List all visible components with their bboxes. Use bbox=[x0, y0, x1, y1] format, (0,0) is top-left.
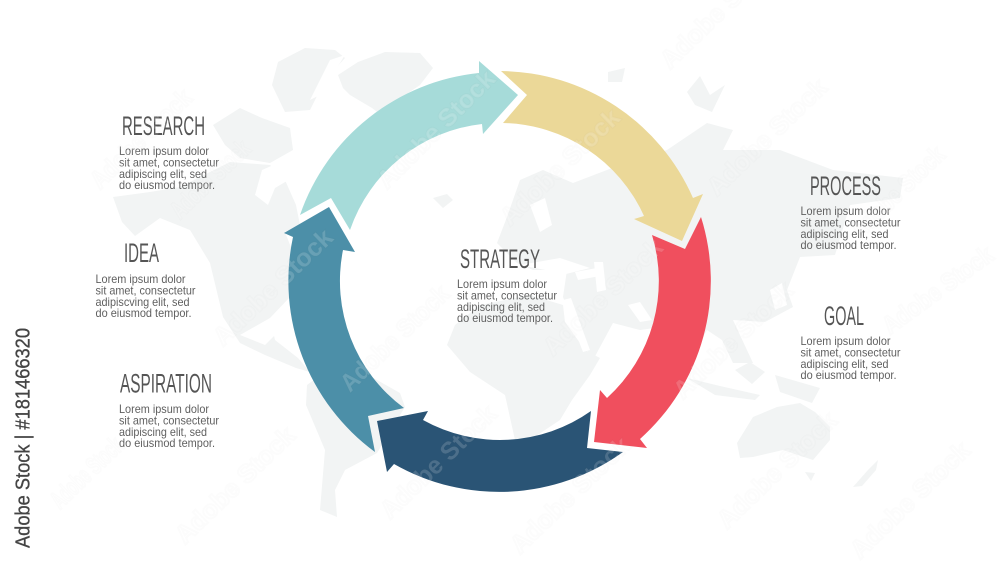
text block: process bbox=[800, 171, 900, 252]
text block: aspiration bbox=[119, 368, 219, 450]
text block: idea bbox=[96, 238, 196, 320]
stock watermarks: Adobe Stock bbox=[845, 436, 976, 563]
text block: aspiration: sit amet, consectetur bbox=[119, 414, 219, 428]
text block: process: do eiusmod tempor. bbox=[800, 238, 896, 252]
stock watermarks: Adobe Stock bbox=[85, 84, 198, 194]
text block: strategy: Lorem ipsum dolor bbox=[457, 277, 547, 291]
text block: idea: sit amet, consectetur bbox=[96, 284, 196, 298]
text block: aspiration: ASPIRATION bbox=[120, 368, 212, 398]
text block: process: adipiscing elit, sed bbox=[800, 227, 888, 241]
text block: idea: Lorem ipsum dolor bbox=[96, 272, 186, 286]
stock id side label: Adobe Stock | #181466320 bbox=[12, 328, 34, 548]
text block: process: PROCESS bbox=[810, 171, 881, 201]
stock watermarks: Adobe Stock bbox=[335, 280, 455, 397]
arrow: idea steel blue bbox=[284, 207, 404, 452]
stock watermarks: Adobe Stock bbox=[538, 233, 669, 361]
text block: goal: GOAL bbox=[824, 301, 864, 331]
text block: idea: do eiusmod tempor. bbox=[96, 306, 192, 320]
text block: research: Lorem ipsum dolor bbox=[119, 144, 209, 158]
text block: goal: do eiusmod tempor. bbox=[800, 368, 896, 382]
world map background bbox=[113, 48, 903, 517]
arrow: goal red bbox=[594, 217, 711, 448]
text block: aspiration: do eiusmod tempor. bbox=[119, 436, 215, 450]
text block: goal: sit amet, consectetur bbox=[800, 346, 900, 360]
text block: research bbox=[119, 111, 219, 192]
text block: research: RESEARCH bbox=[122, 111, 205, 141]
text block: research: adipiscing elit, sed bbox=[119, 167, 207, 181]
stock watermarks: Adobe Stock bbox=[702, 73, 833, 201]
text block: strategy: adipiscing elit, sed bbox=[457, 300, 545, 314]
text block: process: Lorem ipsum dolor bbox=[800, 204, 891, 218]
text block: strategy: STRATEGY bbox=[460, 244, 540, 274]
text block: strategy: sit amet, consectetur bbox=[457, 288, 557, 302]
arrow: research teal bbox=[300, 61, 518, 230]
stock watermarks: Adobe Stock bbox=[495, 103, 626, 231]
text block: aspiration: adipiscing elit, sed bbox=[119, 425, 207, 439]
arrow: navy bbox=[377, 411, 623, 492]
text block: process: sit amet, consectetur bbox=[800, 216, 900, 230]
text block: strategy bbox=[457, 244, 557, 325]
stock watermarks: Adobe Stock bbox=[668, 276, 799, 404]
stock watermarks: Adobe Stock bbox=[375, 400, 502, 524]
text block: goal: adipiscing elit, sed bbox=[800, 357, 888, 371]
stock watermarks: Adobe Stock bbox=[712, 406, 843, 534]
text block: idea: adipiscving elit, sed bbox=[96, 295, 190, 309]
text block: research: do eiusmod tempor. bbox=[119, 178, 215, 192]
arrow: process yellow bbox=[501, 71, 703, 241]
text block: goal: Lorem ipsum dolor bbox=[800, 334, 891, 348]
text block: goal bbox=[800, 301, 900, 382]
stock watermarks: Adobe Stock bbox=[505, 431, 636, 559]
stock watermarks: Adobe Stock bbox=[208, 223, 339, 351]
text block: strategy: do eiusmod tempor. bbox=[457, 311, 553, 325]
text block: idea: IDEA bbox=[124, 238, 159, 268]
stock watermarks: Adobe Stock bbox=[170, 421, 301, 549]
stock watermarks: Adobe Stock bbox=[845, 141, 951, 244]
text block: research: sit amet, consectetur bbox=[119, 156, 219, 170]
stock watermarks: Adobe Stock bbox=[45, 432, 129, 514]
stock watermarks: Adobe Stock bbox=[165, 135, 256, 224]
text block: aspiration: Lorem ipsum dolor bbox=[119, 402, 209, 416]
stock watermarks: Adobe Stock bbox=[371, 65, 501, 194]
